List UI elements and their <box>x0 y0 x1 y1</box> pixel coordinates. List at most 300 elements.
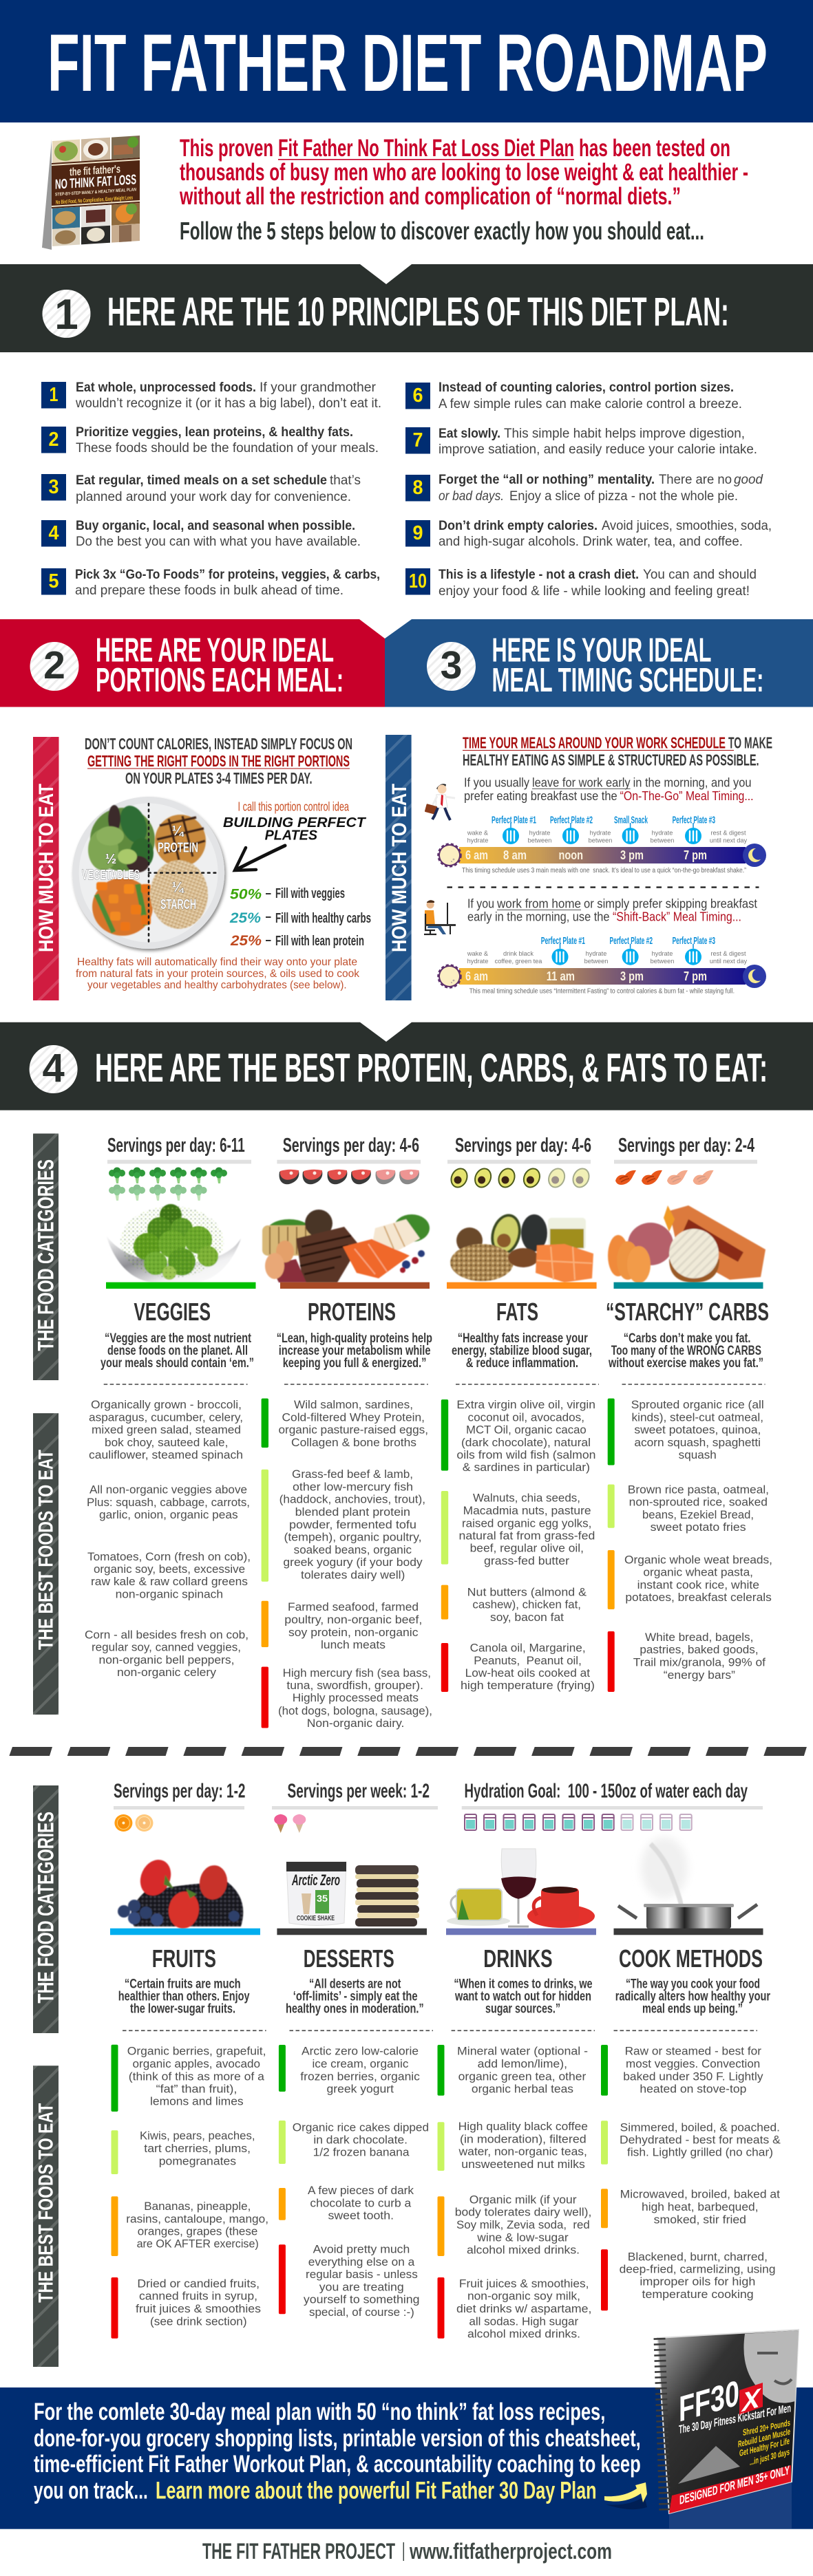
panel: meal timing <box>386 733 772 1000</box>
food list: fats: natural fat from grass-fed <box>458 1530 595 1543</box>
sidebar: the food categories: THE FOOD CATEGORIES <box>34 1159 59 1351</box>
icon row: steak servings <box>279 1170 419 1184</box>
activity labels: drink black <box>503 950 534 957</box>
plate labels: ½ <box>105 852 116 867</box>
food list: fruits: Organic berries, grapefuit, <box>127 2046 266 2058</box>
second timing text: If you <box>467 897 494 911</box>
food list: drinks: Mineral water (optional - <box>457 2046 588 2058</box>
principle 10 <box>405 568 757 599</box>
food list: cook methods: Dehydrated - best for meats & <box>620 2134 781 2147</box>
food list: drinks: organic herbal teas <box>472 2083 573 2096</box>
food list: starchy carbs: Organic whole weat breads, <box>624 1554 772 1566</box>
heading text: HERE ARE YOUR IDEAL <box>96 632 334 669</box>
principle 3 <box>41 473 361 504</box>
heading text: PORTIONS EACH MEAL: <box>96 662 344 699</box>
icon: diet plan book cover <box>42 134 140 250</box>
principle 8: 8 <box>413 477 423 499</box>
category titles <box>152 1944 763 1973</box>
principle 5: Pick 3x “Go-To Foods” for proteins, veggies, & carbs, <box>75 568 380 582</box>
image: protein foods <box>262 1210 430 1282</box>
food list: proteins: High mercury fish (sea bass, <box>283 1667 431 1679</box>
meal labels: Perfect Plate #3 <box>673 815 715 826</box>
intro red statement: Fit Father No Think Fat Loss Diet Plan <box>278 135 574 162</box>
food list: veggies: All non-organic veggies above <box>89 1484 247 1496</box>
legend: plate percentages: 50% <box>230 886 262 902</box>
food list: fats: grass-fed butter <box>484 1555 570 1567</box>
image: fruits <box>118 1855 243 1931</box>
category quotes: without exercise makes you fat.” <box>608 1356 763 1371</box>
first timing text: If you usually <box>464 776 529 790</box>
category quotes: Too many of the WRONG CARBS <box>611 1344 761 1358</box>
food list: drinks: water, non-organic teas, <box>458 2146 587 2158</box>
activity labels: hydrate <box>467 958 488 965</box>
principle 2: 2 <box>48 429 59 451</box>
callout: building perfect plates: PLATES <box>265 828 318 844</box>
category quotes: increase your metabolism while <box>279 1344 431 1358</box>
food list: veggies: garlic, onion, organic peas <box>99 1509 238 1521</box>
principle 2: Prioritize veggies, lean proteins, & healthy fats. <box>76 425 353 440</box>
plate labels: PROTEIN <box>158 841 198 856</box>
icon: businessman running <box>425 784 455 820</box>
principle 7 <box>405 427 757 457</box>
timeline: on-the-go <box>439 815 766 874</box>
icon row: broccoli servings <box>109 1167 227 1201</box>
section heading 1 <box>0 264 813 352</box>
sidebar: how much to eat: HOW MUCH TO EAT <box>388 784 411 952</box>
icon: step number 3: 3 <box>441 643 462 687</box>
servings labels: Servings per day: 1-2 <box>114 1781 245 1803</box>
food list: drinks <box>455 2046 591 2341</box>
red coffee cup <box>527 1887 595 1928</box>
food list: fruits: “fat” than fruit), <box>156 2083 237 2096</box>
sidebar: how much to eat <box>33 737 59 1000</box>
callout: building perfect plates: I call this portion control idea <box>238 800 350 814</box>
second timing text <box>467 897 757 924</box>
icon: step number 2 <box>30 642 78 691</box>
icon: man at desk <box>424 900 456 934</box>
first timing text: leave for work early <box>532 776 631 790</box>
section heading 2 <box>0 619 385 707</box>
meal icons <box>552 944 701 965</box>
food list: veggies <box>85 1399 251 1679</box>
food list: proteins: tolerates dairy well) <box>301 1569 405 1581</box>
footer credit <box>202 2539 612 2564</box>
sidebar: the best foods to eat: THE BEST FOODS TO EAT <box>34 1450 58 1650</box>
food list: drinks: (in moderation), filtered <box>460 2133 587 2145</box>
food list: starchy carbs: pastries, baked goods, <box>640 1644 759 1656</box>
food list: cook methods: smoked, stir fried <box>654 2213 746 2226</box>
icon: diet plan book cover: STEP-BY-STEP MANLY & HEALTHY MEAL PLAN <box>55 187 136 197</box>
food list: fruits: Dried or candied fruits, <box>137 2277 260 2290</box>
food list: starchy carbs: Sprouted organic rice (all <box>631 1399 764 1411</box>
portions intro text: GETTING THE RIGHT FOODS IN THE RIGHT PORTIONS <box>87 752 350 770</box>
image: healthy fats <box>450 1211 593 1282</box>
category quotes <box>118 1977 770 2017</box>
food list: proteins: greek yogury (if your body <box>283 1556 423 1569</box>
image: steaming pot <box>618 1837 757 1929</box>
food list: starchy carbs: organic wheat pasta, <box>643 1567 753 1579</box>
activity labels: coffee, green tea <box>495 958 542 965</box>
category quotes: “Carbs don’t make you fat. <box>624 1331 750 1346</box>
food list: desserts: sweet tooth. <box>328 2210 394 2222</box>
principle 1 <box>41 380 381 411</box>
principle 8: good <box>734 473 763 487</box>
icon: step number 4: 4 <box>42 1046 65 1091</box>
food list: drinks: wine & low-sugar <box>476 2231 569 2244</box>
food list: drinks: Soy milk, Zevia soda, red <box>456 2219 590 2231</box>
time bar: 3 pm <box>620 969 644 983</box>
food list: fats: MCT Oil, organic cacao <box>466 1424 587 1437</box>
food list: cook methods: heated on stove-top <box>640 2083 746 2096</box>
ice cream tub: COOKIE SHAKE <box>297 1915 335 1922</box>
icon: step number 1: 1 <box>54 291 78 339</box>
food tiers: desserts <box>279 2045 286 2314</box>
category titles: VEGGIES <box>134 1298 211 1326</box>
food list: cook methods: fish. Lightly grilled (no char) <box>627 2147 773 2159</box>
color bars <box>106 1282 763 1289</box>
icon: FF30X program book <box>657 2330 799 2529</box>
food list: desserts: you are treating <box>319 2281 404 2293</box>
principle 3: planned around your work day for convenience. <box>76 490 351 504</box>
legend: plate percentages: 25% <box>229 910 261 926</box>
food list: fats: raised organic egg yolks, <box>462 1517 591 1530</box>
category quotes: ‘off-limits’ - simply eat the <box>293 1990 418 2004</box>
food list: veggies: non-organic celery <box>117 1666 217 1679</box>
icon: step number 3 <box>427 642 476 691</box>
food list: starchy carbs <box>624 1399 772 1682</box>
category quotes: “Lean, high-quality proteins help <box>277 1331 432 1346</box>
food list: fats: & sardines in particular) <box>463 1461 590 1474</box>
category quotes: healthy ones in moderation.” <box>286 2002 424 2017</box>
time bar <box>439 844 766 867</box>
meal labels: Perfect Plate #3 <box>673 936 715 947</box>
intro red statement: This proven <box>180 135 273 162</box>
note: healthy fats: from natural fats in your protein sources, & oils used to cook <box>76 968 360 980</box>
legend: plate percentages: Fill with lean protein <box>275 934 364 949</box>
food list: starchy carbs: squash <box>679 1449 717 1461</box>
food list: drinks: non-organic soy milk, <box>467 2290 580 2303</box>
principle 9: and high-sugar alcohols. Drink water, tea, and coffee. <box>439 535 743 549</box>
time bar: 3 pm <box>620 848 644 862</box>
principle 7: Eat slowly. <box>439 427 500 441</box>
image: starchy carbs <box>608 1205 766 1283</box>
food list: starchy carbs: Trail mix/granola, 99% of <box>633 1656 766 1668</box>
banner call to action text: Learn more about the powerful Fit Father 30 Day Plan <box>156 2478 597 2504</box>
second timing text: work from home <box>496 897 581 911</box>
activity labels: between <box>528 837 551 844</box>
principle 1: If your grandmother <box>260 380 377 395</box>
icon row: ice cream servings <box>274 1814 306 1833</box>
food list: veggies: Tomatoes, Corn (fresh on cob), <box>87 1551 251 1563</box>
principle 2: These foods should be the foundation of your meals. <box>76 441 379 455</box>
principle 7: improve satiation, and easily reduce your calorie intake. <box>439 442 757 457</box>
food list: fats: Walnuts, chia seeds, <box>473 1492 580 1504</box>
food list: veggies: organic soy, beets, excessive <box>94 1563 245 1576</box>
panel: 10 principles <box>41 380 772 599</box>
food list: desserts: yourself to something <box>304 2294 420 2306</box>
activity labels: rest & digest <box>710 950 746 957</box>
note: healthy fats: Healthy fats will automatically find their way onto your plate <box>77 956 357 968</box>
food list: proteins: other low-mercury fish <box>293 1481 413 1493</box>
sidebar: the best foods to eat: THE BEST FOODS TO EAT <box>34 2103 58 2303</box>
principle 4: 4 <box>48 522 59 544</box>
heading text <box>492 632 764 699</box>
food tiers: starchy carbs <box>608 1398 615 1692</box>
food list: cook methods: temperature cooking <box>642 2288 754 2301</box>
meal labels: Perfect Plate #1 <box>492 815 536 826</box>
principle 7: 7 <box>413 429 423 451</box>
category quotes: healthier than others. Enjoy <box>118 1990 250 2004</box>
category quotes: the lower-sugar fruits. <box>130 2002 235 2017</box>
food list: desserts: regular basis - unless <box>306 2268 418 2281</box>
activity labels <box>467 830 747 844</box>
food list: fats: beef, regular olive oil, <box>470 1543 584 1555</box>
sidebar: how much to eat <box>386 735 412 1000</box>
principle 5: and prepare these foods in bulk ahead of time. <box>75 583 344 598</box>
activity labels <box>467 950 747 965</box>
portions intro text: ON YOUR PLATES 3-4 TIMES PER DAY. <box>125 769 313 787</box>
ice cream tub <box>286 1862 346 1925</box>
icon row: avocado servings <box>447 1165 593 1191</box>
food list: desserts: in dark chocolate. <box>313 2134 408 2147</box>
food list: desserts: special, of course :-) <box>309 2306 414 2319</box>
icon: diet plan book cover: No Bird Food, No Complication, Easy Weight Loss <box>56 195 133 206</box>
principle 5 <box>41 568 380 598</box>
time bar: 11 am <box>547 969 575 983</box>
food list: drinks: body tolerates dairy well), <box>455 2207 591 2219</box>
food list: proteins: tuna, swordfish, grouper). <box>286 1679 423 1692</box>
food list: proteins: Non-organic dairy. <box>307 1717 404 1730</box>
food list: fruits: tart cherries, plums, <box>144 2143 251 2155</box>
food list: fruits: rasins, cantaloupe, mango, <box>126 2213 268 2225</box>
principle 3: Eat regular, timed meals on a set schedule <box>76 473 327 488</box>
image: drinks <box>447 1849 595 1928</box>
food list: drinks: High quality black coffee <box>458 2121 588 2133</box>
legend: plate percentages: Fill with healthy carbs <box>275 911 371 926</box>
food list: starchy carbs: sweet potato fries <box>651 1521 746 1534</box>
servings labels: Servings per day: 4-6 <box>283 1135 419 1157</box>
category quotes: meal ends up being.” <box>642 2002 743 2017</box>
activity labels: hydrate <box>529 830 550 837</box>
panel: macro food categories <box>33 1134 772 1730</box>
section heading 3 <box>385 619 813 707</box>
food list: proteins: organic pasture-raised eggs, <box>278 1424 428 1437</box>
food list: fats: high temperature (frying) <box>461 1679 595 1692</box>
category titles: FRUITS <box>152 1944 216 1973</box>
activity labels: until next day <box>710 958 747 965</box>
food list: proteins: Grass-fed beef & lamb, <box>292 1468 413 1481</box>
food list: drinks: Fruit juices & smoothies, <box>459 2277 589 2290</box>
category titles: FATS <box>496 1298 538 1326</box>
sidebar: the food categories: THE FOOD CATEGORIES <box>34 1812 59 2004</box>
food list: fats: oils from wild fish (salmon <box>456 1449 596 1461</box>
callout: building perfect plates <box>223 800 367 844</box>
food list: fruits: are OK AFTER exercise) <box>137 2238 259 2251</box>
food list: veggies: cauliflower, steamed spinach <box>89 1449 243 1461</box>
servings labels: Servings per day: 4-6 <box>455 1135 591 1157</box>
food list: cook methods: baked under 350 F. Lightly <box>623 2070 763 2083</box>
panel: portions <box>33 735 371 1000</box>
food list: drinks: all sodas. High sugar <box>469 2315 579 2328</box>
meal labels: Small Snack <box>614 815 648 826</box>
time bar: 7 pm <box>684 969 707 983</box>
portions intro text <box>85 735 352 787</box>
ice cream tub: 35 <box>317 1893 328 1904</box>
rice cakes stack <box>355 1865 419 1926</box>
timing intro text <box>463 733 772 769</box>
food list: veggies: asparagus, cucumber, celery, <box>89 1411 243 1424</box>
icon row: water glasses <box>464 1814 693 1830</box>
food list: proteins: Highly processed meats <box>293 1692 419 1704</box>
food list: cook methods: high heat, barbequed, <box>642 2201 759 2213</box>
plate labels <box>82 824 198 912</box>
banner call to action text: you on track... <box>34 2478 148 2504</box>
food list: veggies: Organically grown - broccoli, <box>91 1399 242 1411</box>
first timing text: in the morning, and you <box>633 776 752 790</box>
principle 3: 3 <box>48 476 59 498</box>
principle 10: This is a lifestyle - not a crash diet. <box>439 568 639 582</box>
food list: veggies: mixed green salad, steamed <box>92 1424 241 1437</box>
second timing text: or simply prefer skipping breakfast <box>584 897 757 911</box>
activity labels: between <box>589 837 612 844</box>
meal icons <box>503 823 701 844</box>
icon: diet plan book cover: the fit father's <box>70 164 120 178</box>
time bar: noon <box>559 848 583 862</box>
food list: veggies: Corn - all besides fresh on cob, <box>85 1629 249 1641</box>
principle 9: Don’t drink empty calories. <box>439 519 598 533</box>
food list: desserts: Arctic zero low-calorie <box>302 2046 419 2058</box>
sidebar: the best foods to eat <box>33 2065 59 2367</box>
cover text <box>679 2373 791 2467</box>
food list: proteins: blended plant protein <box>295 1506 410 1518</box>
food list: cook methods: Simmered, boiled, & poached. <box>620 2121 780 2134</box>
food list: proteins: Farmed seafood, farmed <box>288 1601 419 1613</box>
principle 1: Eat whole, unprocessed foods. <box>76 380 256 395</box>
food list: drinks: organic green tea, other <box>458 2070 587 2083</box>
food list: desserts: 1/2 frozen banana <box>313 2147 410 2159</box>
food list: proteins: Collagen & bone broths <box>291 1437 416 1449</box>
food list: proteins: poultry, non-organic beef, <box>284 1613 422 1626</box>
food list: starchy carbs: “energy bars” <box>664 1669 735 1682</box>
header banner <box>0 0 813 122</box>
food list: cook methods: most veggies. Convection <box>626 2058 760 2070</box>
time bar: 8 am <box>503 848 527 862</box>
meal labels: Perfect Plate #1 <box>541 936 585 947</box>
meal labels <box>492 815 715 826</box>
food list: veggies: non-organic spinach <box>116 1588 223 1600</box>
food list: fruits: canned fruits in syrup, <box>139 2290 257 2303</box>
food list: desserts: everything else on a <box>308 2256 415 2268</box>
food list: proteins <box>278 1399 432 1730</box>
food list: fats: soy, bacon fat <box>490 1611 564 1624</box>
plate labels: ¼ <box>172 824 185 839</box>
category titles: PROTEINS <box>308 1298 396 1326</box>
food list: fats: Extra virgin olive oil, virgin <box>456 1399 595 1411</box>
food list: starchy carbs: sweet potatoes, quinoa, <box>634 1424 761 1437</box>
principle 10: enjoy your food & life - while looking and feeling great! <box>439 584 750 599</box>
food list: proteins: (hot dogs, bologna, sausage), <box>278 1705 432 1717</box>
vegetables: salad and carrots <box>88 802 155 936</box>
icon: step number 4 <box>30 1045 78 1093</box>
meal labels <box>541 936 715 947</box>
food list: desserts: Organic rice cakes dipped <box>293 2121 429 2134</box>
icon: diet plan book cover: NO THINK FAT LOSS <box>55 172 136 193</box>
note: healthy fats <box>76 956 360 991</box>
food list: proteins: powder, fermented tofu <box>289 1518 416 1531</box>
food list: veggies: regular soy, canned veggies, <box>92 1642 241 1654</box>
food list: desserts: greek yogurt <box>326 2083 394 2096</box>
intro panel <box>42 134 748 250</box>
time bar: 6 am <box>465 848 488 862</box>
food list: starchy carbs: potatoes, breakfast celerals <box>625 1591 772 1604</box>
principle 1: wouldn’t recognize it (or it has a big label), don’t eat it. <box>75 396 381 411</box>
schedule note: This meal timing schedule uses “Intermittent Fasting” to control calories & burn fat - while staying full. <box>469 987 735 996</box>
food list: fats: cashew), chicken fat, <box>472 1599 581 1611</box>
activity labels: hydrate <box>467 837 488 844</box>
plate labels: VEGETABLES <box>82 868 140 883</box>
time bar <box>439 965 766 988</box>
food list: fruits: pomegranates <box>159 2155 236 2167</box>
meal labels: Perfect Plate #2 <box>610 936 653 947</box>
plate diagram <box>72 797 224 949</box>
cover portrait <box>678 2330 799 2484</box>
food list: proteins: Wild salmon, sardines, <box>294 1399 413 1411</box>
food list: desserts: frozen berries, organic <box>300 2070 420 2083</box>
principle 9: 9 <box>413 522 423 544</box>
category quotes: radically alters how healthy your <box>615 1990 770 2004</box>
first timing text: “On-The-Go” Meal Timing... <box>620 789 754 803</box>
intro red statement: has been tested on <box>579 135 730 162</box>
food list: drinks: Organic milk (if your <box>469 2193 577 2206</box>
second timing text: early in the morning, use the <box>467 910 610 924</box>
first timing text: prefer eating breakfast use the <box>464 789 617 803</box>
food list: cook methods: deep-fried, carmelizing, using <box>620 2264 775 2276</box>
food list: fruits: lemons and limes <box>150 2096 244 2108</box>
callout: building perfect plates: BUILDING PERFECT <box>223 815 367 830</box>
activity labels: hydrate <box>652 830 673 837</box>
category titles: DRINKS <box>483 1944 553 1973</box>
food tiers: drinks <box>438 2045 445 2339</box>
food list: desserts <box>293 2046 429 2319</box>
activity labels: wake & <box>467 830 488 837</box>
principle 2 <box>41 425 379 455</box>
plate labels: ¼ <box>172 880 185 895</box>
icon: step number 2: 2 <box>43 643 65 687</box>
arrow: brush arrow to plate <box>235 846 285 870</box>
food list: proteins: soaked beans, organic <box>294 1544 412 1556</box>
principle 8: Forget the “all or nothing” mentality. <box>439 473 655 487</box>
icon row: sweet potato servings <box>615 1170 714 1185</box>
food list: cook methods <box>620 2046 781 2301</box>
food list: veggies: raw kale & raw collard greens <box>91 1576 248 1588</box>
principle 8: or bad days. <box>439 489 504 504</box>
food tiers: fats <box>441 1399 448 1692</box>
activity labels: between <box>651 958 674 965</box>
category quotes: “The way you cook your food <box>626 1977 760 1991</box>
food list: fats: Nut butters (almond & <box>467 1586 587 1598</box>
category quotes: “Veggies are the most nutrient <box>105 1331 252 1346</box>
intro red statement <box>179 135 748 210</box>
activity labels: between <box>651 837 674 844</box>
cover text: X <box>741 2383 761 2418</box>
time bar: 7 pm <box>684 848 707 862</box>
cover red banner <box>669 2462 791 2513</box>
icon row: orange servings <box>114 1814 153 1832</box>
category quotes: sugar sources.” <box>485 2002 560 2017</box>
activity labels: until next day <box>710 837 747 844</box>
category titles: DESSERTS <box>304 1944 394 1973</box>
food list: fats: (dark chocolate), natural <box>461 1437 591 1449</box>
